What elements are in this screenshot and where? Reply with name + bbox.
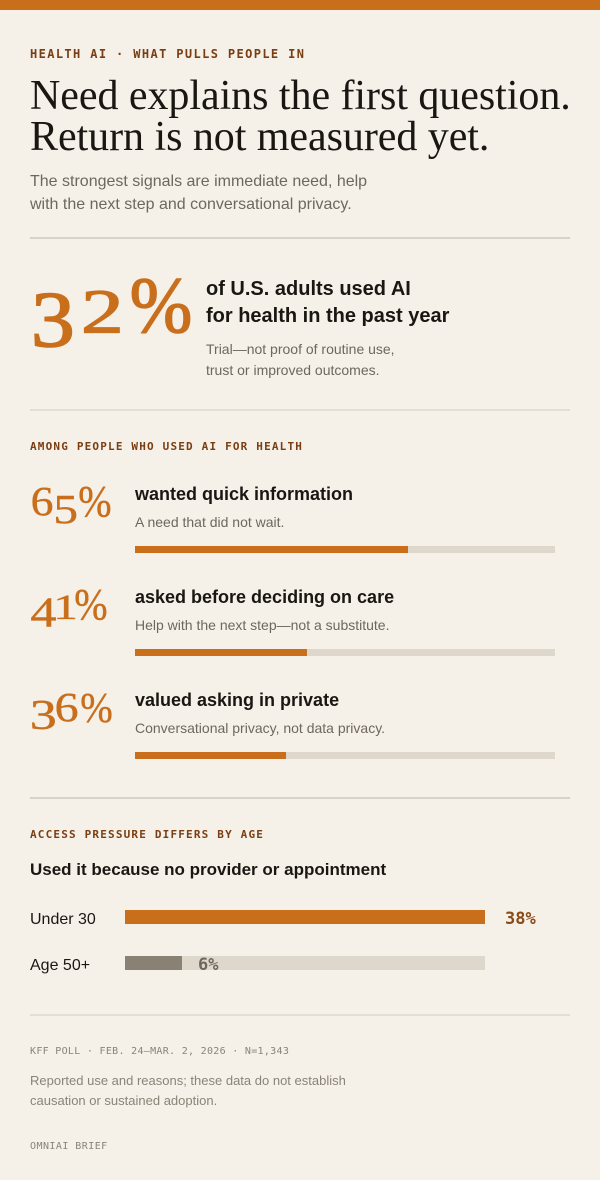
bar chart: access by age <box>30 909 536 975</box>
value: 3 <box>30 691 57 739</box>
footnote <box>30 1073 346 1108</box>
title: Return is not measured yet. <box>30 114 489 160</box>
stat statement: for health in the past year <box>206 305 449 327</box>
panel: headline stat <box>31 261 450 378</box>
bar under 30 <box>125 910 485 924</box>
panel: reason 36% <box>30 684 555 759</box>
row label 50+: Age 50+ <box>30 957 90 974</box>
value: % <box>80 684 113 731</box>
big number 32%: 3 <box>31 277 75 364</box>
panel: reason 41% <box>30 581 555 656</box>
reason note: Help with the next step—not a substitute. <box>135 617 389 633</box>
value <box>31 478 112 532</box>
big number 32%: % <box>130 261 192 349</box>
value: 1 <box>53 588 78 627</box>
stat statement: of U.S. adults used AI <box>206 278 411 300</box>
reason note: A need that did not wait. <box>135 514 284 530</box>
value <box>30 684 113 739</box>
value: 4 <box>30 590 56 636</box>
progress bar <box>135 546 555 553</box>
stat caveat: Trial—not proof of routine use, <box>206 341 395 357</box>
top accent bar <box>0 0 600 10</box>
footnote: Reported use and reasons; these data do not establish <box>30 1073 346 1088</box>
stat caveat: trust or improved outcomes. <box>206 362 380 378</box>
reason heading: wanted quick information <box>135 484 353 504</box>
stat statement <box>206 278 450 327</box>
chart heading: Used it because no provider or appointment <box>30 860 386 879</box>
footnote: causation or sustained adoption. <box>30 1093 217 1108</box>
value: 6 <box>31 479 53 524</box>
panel: reason 65% <box>31 478 555 553</box>
reason note: Conversational privacy, not data privacy. <box>135 720 385 736</box>
big number 32% <box>31 261 192 364</box>
value 6%: 6% <box>198 955 218 975</box>
value: % <box>78 478 112 526</box>
row label under 30: Under 30 <box>30 911 96 928</box>
subtitle <box>30 173 367 213</box>
stat caveat <box>206 341 395 378</box>
subtitle: The strongest signals are immediate need, help <box>30 173 367 190</box>
big number 32%: 2 <box>81 278 124 347</box>
reason heading: asked before deciding on care <box>135 587 394 607</box>
value: 5 <box>53 486 78 532</box>
title: Need explains the first question. <box>30 73 571 119</box>
value: % <box>74 581 108 629</box>
reason heading: valued asking in private <box>135 690 339 710</box>
section label: access pressure: ACCESS PRESSURE DIFFERS BY AGE <box>30 828 264 841</box>
progress bar <box>135 649 555 656</box>
value <box>30 581 108 636</box>
value: 6 <box>55 684 79 730</box>
source line: KFF POLL · FEB. 24–MAR. 2, 2026 · N=1,343 <box>30 1046 289 1057</box>
title <box>30 73 571 160</box>
eyebrow: HEALTH AI · WHAT PULLS PEOPLE IN <box>30 47 305 61</box>
progress bar <box>135 752 555 759</box>
bar age 50+ <box>125 956 485 970</box>
section label: among people: AMONG PEOPLE WHO USED AI FOR HEALTH <box>30 440 303 453</box>
value 38%: 38% <box>505 909 536 929</box>
brand: OMNIAI BRIEF <box>30 1141 108 1152</box>
subtitle: with the next step and conversational privacy. <box>30 196 352 213</box>
